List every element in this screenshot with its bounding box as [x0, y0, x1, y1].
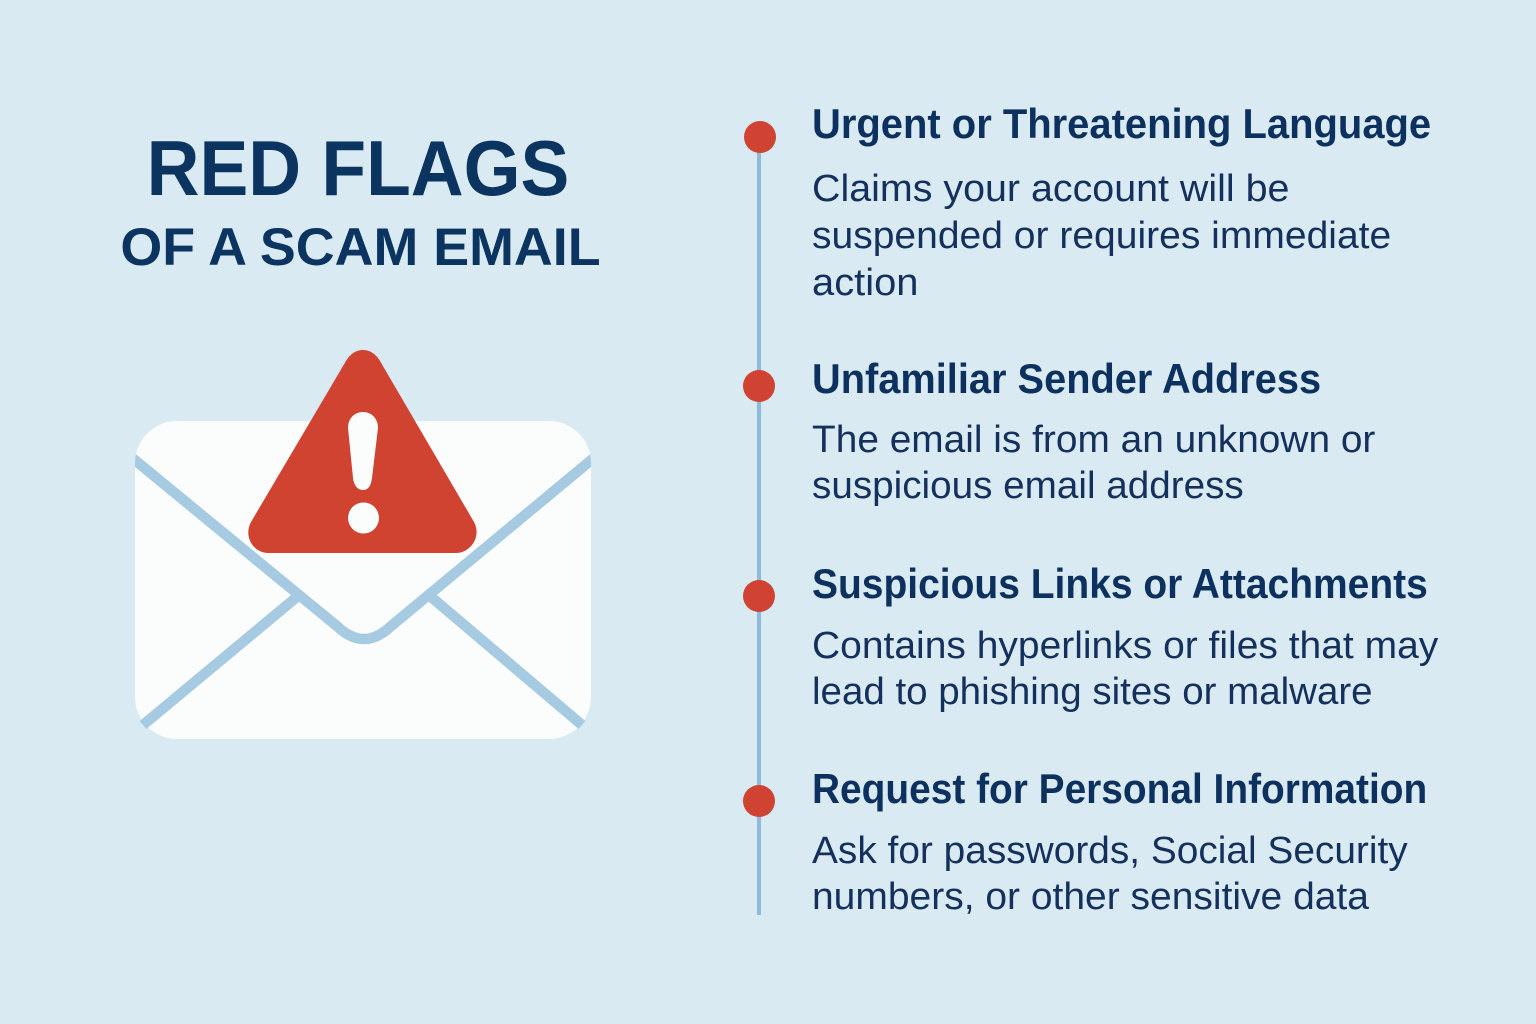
timeline marker 4 — [743, 785, 775, 817]
text: urgent language description: action — [812, 262, 918, 304]
text: suspicious links description: lead to phishing sites or malware — [812, 671, 1373, 713]
text: unfamiliar sender description — [812, 419, 1375, 507]
subtitle: OF A SCAM EMAIL — [120, 218, 601, 277]
envelope body — [135, 421, 591, 739]
text: unfamiliar sender description: The email is from an unknown or — [812, 419, 1375, 461]
envelope flap lines — [125, 452, 601, 639]
heading: urgent language: Urgent or Threatening Language — [812, 100, 1431, 147]
text: suspicious links description — [812, 625, 1438, 713]
text: suspicious links description: Contains hyperlinks or files that may — [812, 625, 1438, 667]
timeline marker 3 — [743, 580, 775, 612]
timeline marker 2 — [743, 370, 775, 402]
text: personal information description: Ask for passwords, Social Security — [812, 830, 1408, 872]
title: RED FLAGS — [147, 124, 569, 212]
text: urgent language description: suspended or requires immediate — [812, 215, 1391, 257]
timeline line — [757, 136, 761, 915]
text: unfamiliar sender description: suspicious email address — [812, 465, 1244, 507]
warning triangle — [248, 350, 477, 553]
text: urgent language description — [812, 168, 1391, 304]
text: urgent language description: Claims your account will be — [812, 168, 1289, 210]
heading: unfamiliar sender: Unfamiliar Sender Address — [812, 355, 1321, 402]
icon: envelope with warning triangle — [135, 350, 591, 739]
heading: suspicious links: Suspicious Links or Attachments — [812, 560, 1428, 607]
text: personal information description: numbers, or other sensitive data — [812, 876, 1369, 918]
envelope lower fold lines — [143, 596, 582, 725]
timeline marker 1 — [744, 121, 776, 153]
exclamation mark — [348, 412, 379, 534]
text: personal information description — [812, 830, 1408, 918]
heading: personal information: Request for Personal Information — [812, 765, 1427, 812]
